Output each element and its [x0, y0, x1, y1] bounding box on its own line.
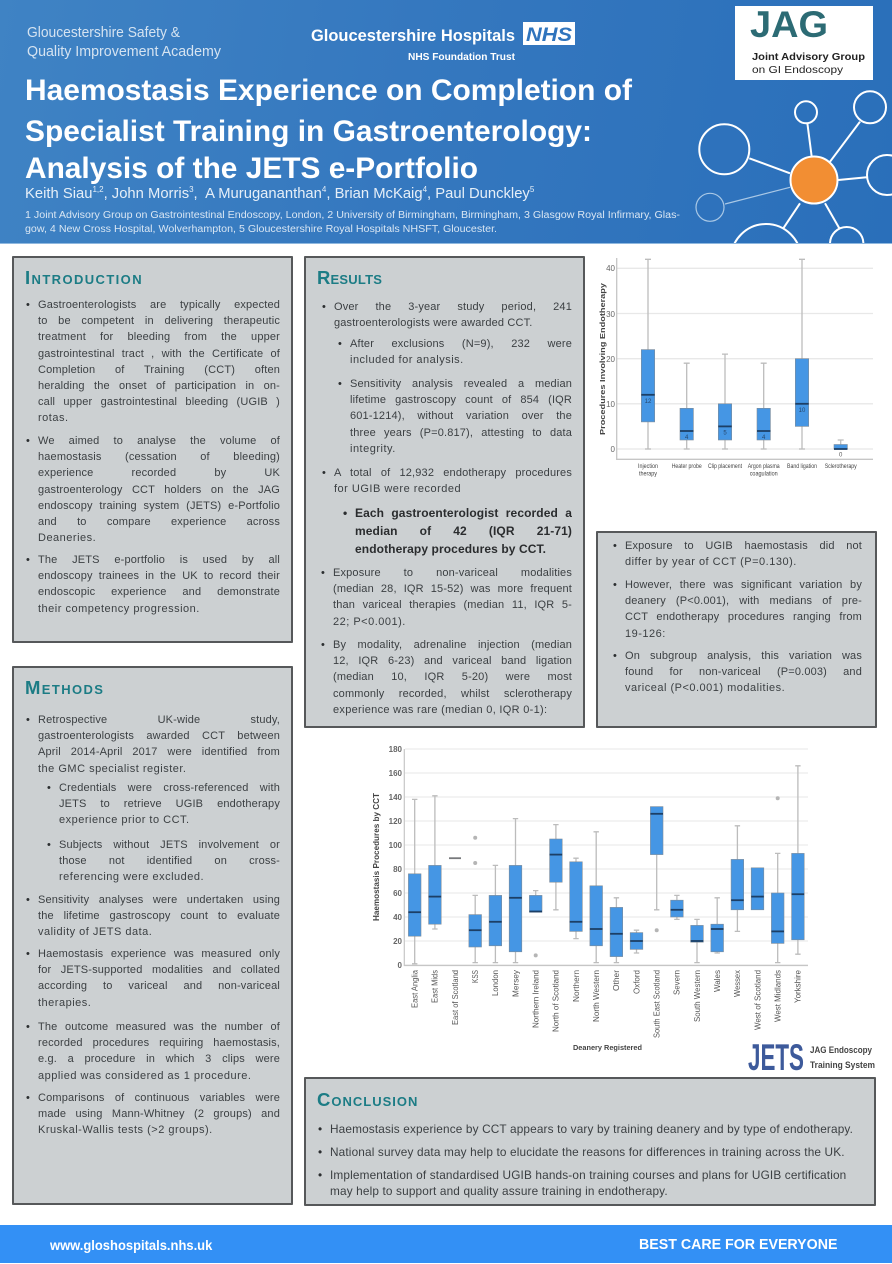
box: band ligation: [795, 259, 809, 449]
box: East of Scotland: [449, 857, 461, 859]
box: clip placement: [718, 354, 732, 449]
text: methods bullet 2: the lifetime gastroscopy count to evaluate: [38, 910, 280, 922]
text: introduction bullet 2: experience recorded by UK: [38, 467, 280, 479]
text: conclusion bullet 3: [330, 1167, 860, 1199]
text: results bullet 2: for UGIB were recorded: [334, 483, 461, 495]
box: Northern: [570, 858, 582, 939]
text: introduction bullet 1: treatment for bleeding from the upper: [38, 331, 280, 343]
heading: results: Results: [317, 267, 382, 288]
text: results sub-bullet sensitivity: lifetime gastroscopy count of 854 (IQR: [350, 394, 572, 406]
box: sclerotherapy: [834, 440, 847, 458]
text: methods bullet 1: [38, 712, 280, 777]
text: methods bullet 4: recorded procedures requiring haemostasis,: [38, 1037, 280, 1049]
box: band ligation: 10: [799, 408, 806, 414]
affiliations: gow, 4 New Cross Hospital, Wolverhampton, 5 Gloucestershire Royal Hospitals NHSFT, Gloucester.: [25, 224, 497, 235]
text: results sub-bullet sensitivity: three years (P=0.817), attesting to data: [350, 427, 572, 439]
y axis labels: [606, 264, 616, 454]
affiliations: 1 Joint Advisory Group on Gastrointestinal Endoscopy, London, 2 University of Birmingham, Birmingham, 3 Glasgow Royal Infirmary, Glas-: [25, 210, 680, 221]
text: deanery bullet 3: found for non-variceal (P=0.003) and: [625, 666, 862, 678]
text: results sub-bullet sensitivity: 601-1214), without variation over the: [350, 410, 572, 422]
trust logo: Gloucestershire Hospitals: [311, 26, 515, 45]
text: results bullet 2: A total of 12,932 endotherapy procedures: [334, 467, 572, 479]
text: methods bullet 4: The outcome measured was the number of: [38, 1021, 280, 1033]
text: introduction bullet 1: [38, 297, 280, 426]
box: South East Scotland: [650, 807, 663, 932]
x axis labels: Mersey: [511, 970, 520, 997]
x axis labels: Sclerotherapy: [825, 463, 857, 470]
main title: Analysis of the JETS e-Portfolio: [25, 152, 478, 185]
y axis labels: 40: [606, 264, 616, 273]
text: methods bullet 5: Kruskal-Wallis tests (>2 groups).: [38, 1124, 213, 1136]
text: results sub-bullet sensitivity: Sensitivity analysis revealed a median: [350, 378, 572, 390]
text: results sub-bullet exclusions: After exclusions (N=9), 232 were: [350, 338, 572, 350]
y axis labels: 80: [393, 865, 403, 874]
JETS logo: Training System: [810, 1060, 875, 1071]
y axis labels: 10: [606, 400, 616, 409]
y axis labels: [389, 745, 403, 970]
y axis title: Haemostasis Procedures by CCT: [372, 793, 381, 921]
text: key finding: endotherapy procedures by CCT.: [355, 542, 546, 556]
text: deanery bullet 3: variceal (P<0.001) modalities.: [625, 682, 785, 694]
text: deanery bullet 2: CCT endotherapy procedures ranging from: [625, 611, 862, 623]
text: results bullet 4: commonly recorded, whilst sclerotherapy: [333, 688, 572, 700]
y axis labels: 60: [393, 889, 403, 898]
y axis labels: 20: [606, 355, 616, 364]
x axis labels: East Anglia: [410, 969, 420, 1008]
panel: introduction: [12, 256, 293, 643]
text: introduction bullet 2: Deaneries.: [38, 532, 96, 544]
trust logo: NHS: [526, 25, 572, 46]
text: introduction bullet 2: gastroenterology CCT holders on the JAG: [38, 484, 280, 496]
text: methods bullet 4: applied was considered as 1 procedure.: [38, 1070, 251, 1082]
x axis labels: Band ligation: [787, 463, 817, 470]
text: introduction bullet 1: heralding the onset of participation in on-: [38, 380, 280, 392]
text: methods bullet 2: Sensitivity analyses were undertaken using: [38, 894, 280, 906]
text: introduction bullet 2: We aimed to analyse the volume of: [38, 435, 280, 447]
main title: Specialist Training in Gastroenterology:: [25, 115, 592, 148]
x axis labels: Clip placement: [708, 463, 742, 470]
text: methods bullet 1: Retrospective UK-wide study,: [38, 714, 280, 726]
text: introduction bullet 3: their competency progression.: [38, 603, 200, 615]
y axis labels: 30: [606, 310, 616, 319]
x axis labels: Yorkshire: [794, 969, 803, 1003]
academy logo text: Quality Improvement Academy: [27, 43, 221, 60]
text: methods bullet 1: the GMC specialist register.: [38, 763, 186, 775]
x axis labels: West Midlands: [774, 970, 782, 1022]
text: introduction bullet 1: call upper gastrointestinal bleeding (UGIB ): [38, 396, 280, 408]
footer slogan: BEST CARE FOR EVERYONE: [639, 1237, 837, 1253]
box: Severn: [671, 895, 683, 919]
box: clip placement: 5: [723, 430, 727, 436]
text: results bullet 3: [333, 565, 572, 630]
x axis labels: coagulation: [750, 470, 778, 478]
JAG logo: Joint Advisory Group: [752, 52, 865, 63]
x axis labels: East of Scotland: [451, 970, 460, 1025]
x axis labels: North Western: [592, 970, 601, 1022]
box: East Anglia: [408, 799, 421, 964]
chart: haemostasis procedures by deanery: [372, 745, 875, 1075]
x axis labels: Northern Ireland: [532, 970, 540, 1028]
box: heater probe: 4: [685, 435, 689, 441]
box: South Western: [691, 919, 703, 963]
text: deanery bullet 1: Exposure to UGIB haemostasis did not: [625, 540, 862, 552]
text: results bullet 1: gastroenterologists were awarded CCT.: [334, 317, 533, 329]
x axis labels: Severn: [673, 970, 682, 995]
x axis labels: [638, 463, 857, 478]
text: results bullet 3: Exposure to non-variceal modalities: [333, 567, 572, 579]
box: injection therapy: [641, 259, 655, 449]
text: methods bullet 2: validity of JETS data.: [38, 926, 152, 938]
x axis title: Deanery Registered: [573, 1045, 642, 1052]
text: methods sub-bullet credentials: [59, 780, 280, 829]
box: Oxford: [630, 930, 643, 953]
affiliations: [25, 210, 680, 235]
text: results bullet 3: (median 28, IQR 15-52) was more frequent: [333, 583, 572, 595]
text: introduction bullet 3: The JETS e-portfolio is used by all: [38, 554, 280, 566]
text: results bullet 1: Over the 3-year study period, 241: [334, 301, 572, 313]
heading: methods: Methods: [25, 677, 104, 698]
text: introduction bullet 2: haemostasis (cessation of bleeding): [38, 451, 280, 463]
heading: conclusion: Conclusion: [317, 1089, 418, 1110]
footer website: www.gloshospitals.nhs.uk: [50, 1237, 212, 1253]
text: introduction bullet 1: to be competent in delivering therapeutic: [38, 315, 280, 327]
JAG logo: on GI Endoscopy: [752, 65, 843, 76]
heading: introduction: Introduction: [25, 267, 143, 288]
text: methods bullet 5: Comparisons of continuous variables were: [38, 1092, 280, 1104]
text: introduction bullet 2: [38, 433, 280, 546]
text: results bullet 2: [334, 465, 572, 497]
text: results bullet 4: experience was rare (median 0, IQR 0-1):: [333, 704, 547, 716]
panel: conclusion: [304, 1077, 876, 1206]
text: results sub-bullet exclusions: [350, 336, 572, 368]
text: key finding: [355, 504, 572, 558]
header graphics and text: [25, 4, 892, 243]
y axis labels: 20: [393, 937, 403, 946]
text: methods bullet 3: Haemostasis experience was measured only: [38, 948, 280, 960]
x axis labels: Northern: [572, 970, 581, 1002]
text: results bullet 3: 22; P<0.001).: [333, 616, 406, 628]
text: methods bullet 1: April 2014-April 2017 were identified from: [38, 746, 280, 758]
box: argon plasma coagulation: 4: [762, 435, 766, 441]
box: West of Scotland: [751, 868, 764, 910]
y axis labels: 0: [611, 445, 616, 454]
panel: methods: [12, 666, 293, 1205]
panel: deanery findings: [596, 531, 877, 728]
y axis labels: 120: [389, 817, 403, 826]
y axis labels: 140: [389, 793, 403, 802]
y axis labels: 180: [389, 745, 403, 754]
box: Northern Ireland: [529, 891, 542, 957]
main title: [25, 74, 632, 185]
x axis labels: West of Scotland: [753, 970, 762, 1030]
JETS logo: JAG Endoscopy: [810, 1045, 873, 1056]
text: conclusion bullet 3: Implementation of standardised UGIB hands-on training courses and plans for UGIB certification: [330, 1168, 846, 1182]
text: methods bullet 4: e.g. a procedure in which 3 clips were: [38, 1053, 280, 1065]
text: methods bullet 4: [38, 1019, 280, 1084]
text: deanery bullet 2: 19-126:: [625, 628, 666, 640]
text: results bullet 4: (median 10, IQR 5-20) were most: [333, 671, 572, 683]
text: introduction bullet 3: endoscopic experience and demonstrate: [38, 586, 280, 598]
text: introduction bullet 3: [38, 552, 280, 617]
icon: network of circles: [696, 91, 892, 294]
text: deanery bullet 3: [625, 648, 862, 697]
y axis labels: 0: [398, 961, 403, 970]
box: London: [489, 865, 502, 963]
x axis labels: [410, 969, 803, 1038]
text: methods bullet 1: gastroenterologists awarded CCT between: [38, 730, 280, 742]
box: Wales: [711, 898, 724, 953]
text: key finding: Each gastroenterologist recorded a: [355, 506, 572, 520]
text: introduction bullet 1: Completion of Training (CCT) often: [38, 364, 280, 376]
y axis labels: 100: [389, 841, 403, 850]
text: methods bullet 5: made using Mann-Whitney (2 groups) and: [38, 1108, 280, 1120]
y axis labels: 160: [389, 769, 403, 778]
text: introduction bullet 2: and to compare experience across: [38, 516, 280, 528]
x axis labels: Argon plasma: [748, 463, 780, 470]
JETS logo: [748, 1037, 875, 1078]
text: methods sub-bullet subjects: referencing were excluded.: [59, 871, 204, 883]
text: methods sub-bullet subjects: those not identified on cross-: [59, 855, 280, 867]
y axis labels: 40: [393, 913, 403, 922]
x axis labels: Other: [612, 970, 621, 991]
text: conclusion bullet 1: Haemostasis experience by CCT appears to vary by training deanery and by type of endotherapy.: [330, 1122, 853, 1136]
box: heater probe: [680, 363, 693, 449]
text: methods sub-bullet credentials: Credentials were cross-referenced with: [59, 782, 280, 794]
text: deanery bullet 3: On subgroup analysis, this variation was: [625, 650, 862, 662]
x axis labels: therapy: [639, 470, 658, 478]
x axis labels: South East Scotland: [652, 970, 662, 1038]
x axis labels: Wessex: [733, 970, 742, 997]
box: East Mids: [429, 796, 441, 929]
text: results bullet 4: By modality, adrenaline injection (median: [333, 639, 572, 651]
box: North Western: [590, 832, 602, 963]
x axis labels: Oxford: [632, 970, 641, 994]
trust logo: NHS Foundation Trust: [408, 51, 515, 63]
text: results bullet 3: than variceal therapies (median 11, IQR 5-: [333, 599, 572, 611]
box: argon plasma coagulation: [757, 363, 770, 449]
text: methods bullet 3: according to variceal and non-variceal: [38, 980, 280, 992]
text: results bullet 4: [333, 637, 572, 718]
text: deanery bullet 2: [625, 577, 862, 642]
box: West Midlands: [771, 796, 784, 963]
x axis labels: Wales: [713, 970, 722, 992]
text: methods bullet 3: [38, 946, 280, 1011]
text: deanery bullet 2: deanery (P<0.001), with medians of pre-: [625, 595, 862, 607]
text: conclusion bullet 3: may help to support and quality assure training in endotherapy.: [330, 1184, 668, 1198]
text: methods sub-bullet subjects: [59, 837, 280, 886]
text: introduction bullet 1: gastrointestinal tract , with the Certificate of: [38, 348, 280, 360]
box: North of Scotland: [550, 825, 562, 910]
text: methods sub-bullet subjects: Subjects without JETS involvement or: [59, 839, 280, 851]
text: results bullet 4: 12, IQR 6-23) and variceal band ligation: [333, 655, 572, 667]
x axis labels: London: [491, 970, 500, 996]
text: deanery bullet 1: [625, 538, 862, 570]
x axis labels: Heater probe: [672, 463, 702, 470]
panel: results: [304, 256, 585, 728]
text: conclusion bullet 2: National survey data may help to elucidate the reasons for differences in training across the UK.: [330, 1145, 845, 1159]
box: Other: [610, 898, 623, 963]
box: injection therapy: 12: [645, 399, 652, 405]
text: results bullet 1: [334, 299, 572, 331]
text: deanery bullet 2: However, there was significant variation by: [625, 579, 862, 591]
y axis title: Procedures Involving Endotherapy: [598, 282, 607, 435]
header banner: [0, 0, 892, 244]
text: introduction bullet 1: Gastroenterologists are typically expected: [38, 299, 280, 311]
box: Yorkshire: [792, 766, 804, 954]
text: methods sub-bullet credentials: JETS to retrieve UGIB endotherapy: [59, 798, 280, 810]
academy logo text: [27, 24, 221, 60]
text: methods bullet 2: [38, 892, 280, 941]
chart: procedures by endotherapy modality: [598, 258, 873, 478]
JAG logo: [735, 4, 873, 80]
x axis labels: Injection: [638, 463, 658, 470]
text: introduction bullet 2: endoscopy training system (JETS) e-Portfolio: [38, 500, 280, 512]
text: results sub-bullet sensitivity: [350, 376, 572, 457]
text: deanery bullet 1: differ by year of CCT (P=0.130).: [625, 556, 797, 568]
academy logo text: Gloucestershire Safety &: [27, 24, 180, 41]
text: methods bullet 3: for JETS-supported modalities and collated: [38, 964, 280, 976]
text: methods bullet 5: [38, 1090, 280, 1139]
x axis labels: North of Scotland: [552, 970, 561, 1032]
x axis labels: KSS: [471, 970, 480, 983]
text: methods bullet 3: therapies.: [38, 997, 91, 1009]
text: introduction bullet 3: endoscopy trainees in the UK to record their: [38, 570, 280, 582]
x axis labels: East Mids: [431, 970, 440, 1003]
text: introduction bullet 1: rotas.: [38, 412, 69, 424]
authors: Keith Siau1,2, John Morris3, A Murugananthan4, Brian McKaig4, Paul Dunckley5: [25, 185, 534, 202]
box: sclerotherapy: 0: [839, 452, 843, 458]
text: key finding: median of 42 (IQR 21-71): [355, 524, 572, 538]
text: results sub-bullet exclusions: included for analysis.: [350, 354, 464, 366]
box: Wessex: [731, 826, 744, 931]
footer bar: [0, 1225, 892, 1263]
x axis labels: South Western: [693, 970, 702, 1022]
main title: Haemostasis Experience on Completion of: [25, 74, 632, 107]
text: methods sub-bullet credentials: experience prior to CCT.: [59, 814, 190, 826]
JAG logo: JAG: [750, 4, 828, 45]
text: results sub-bullet sensitivity: integrity.: [350, 443, 396, 455]
box: Mersey: [509, 819, 522, 963]
trust logo: [311, 22, 575, 63]
box: KSS: [469, 836, 482, 963]
